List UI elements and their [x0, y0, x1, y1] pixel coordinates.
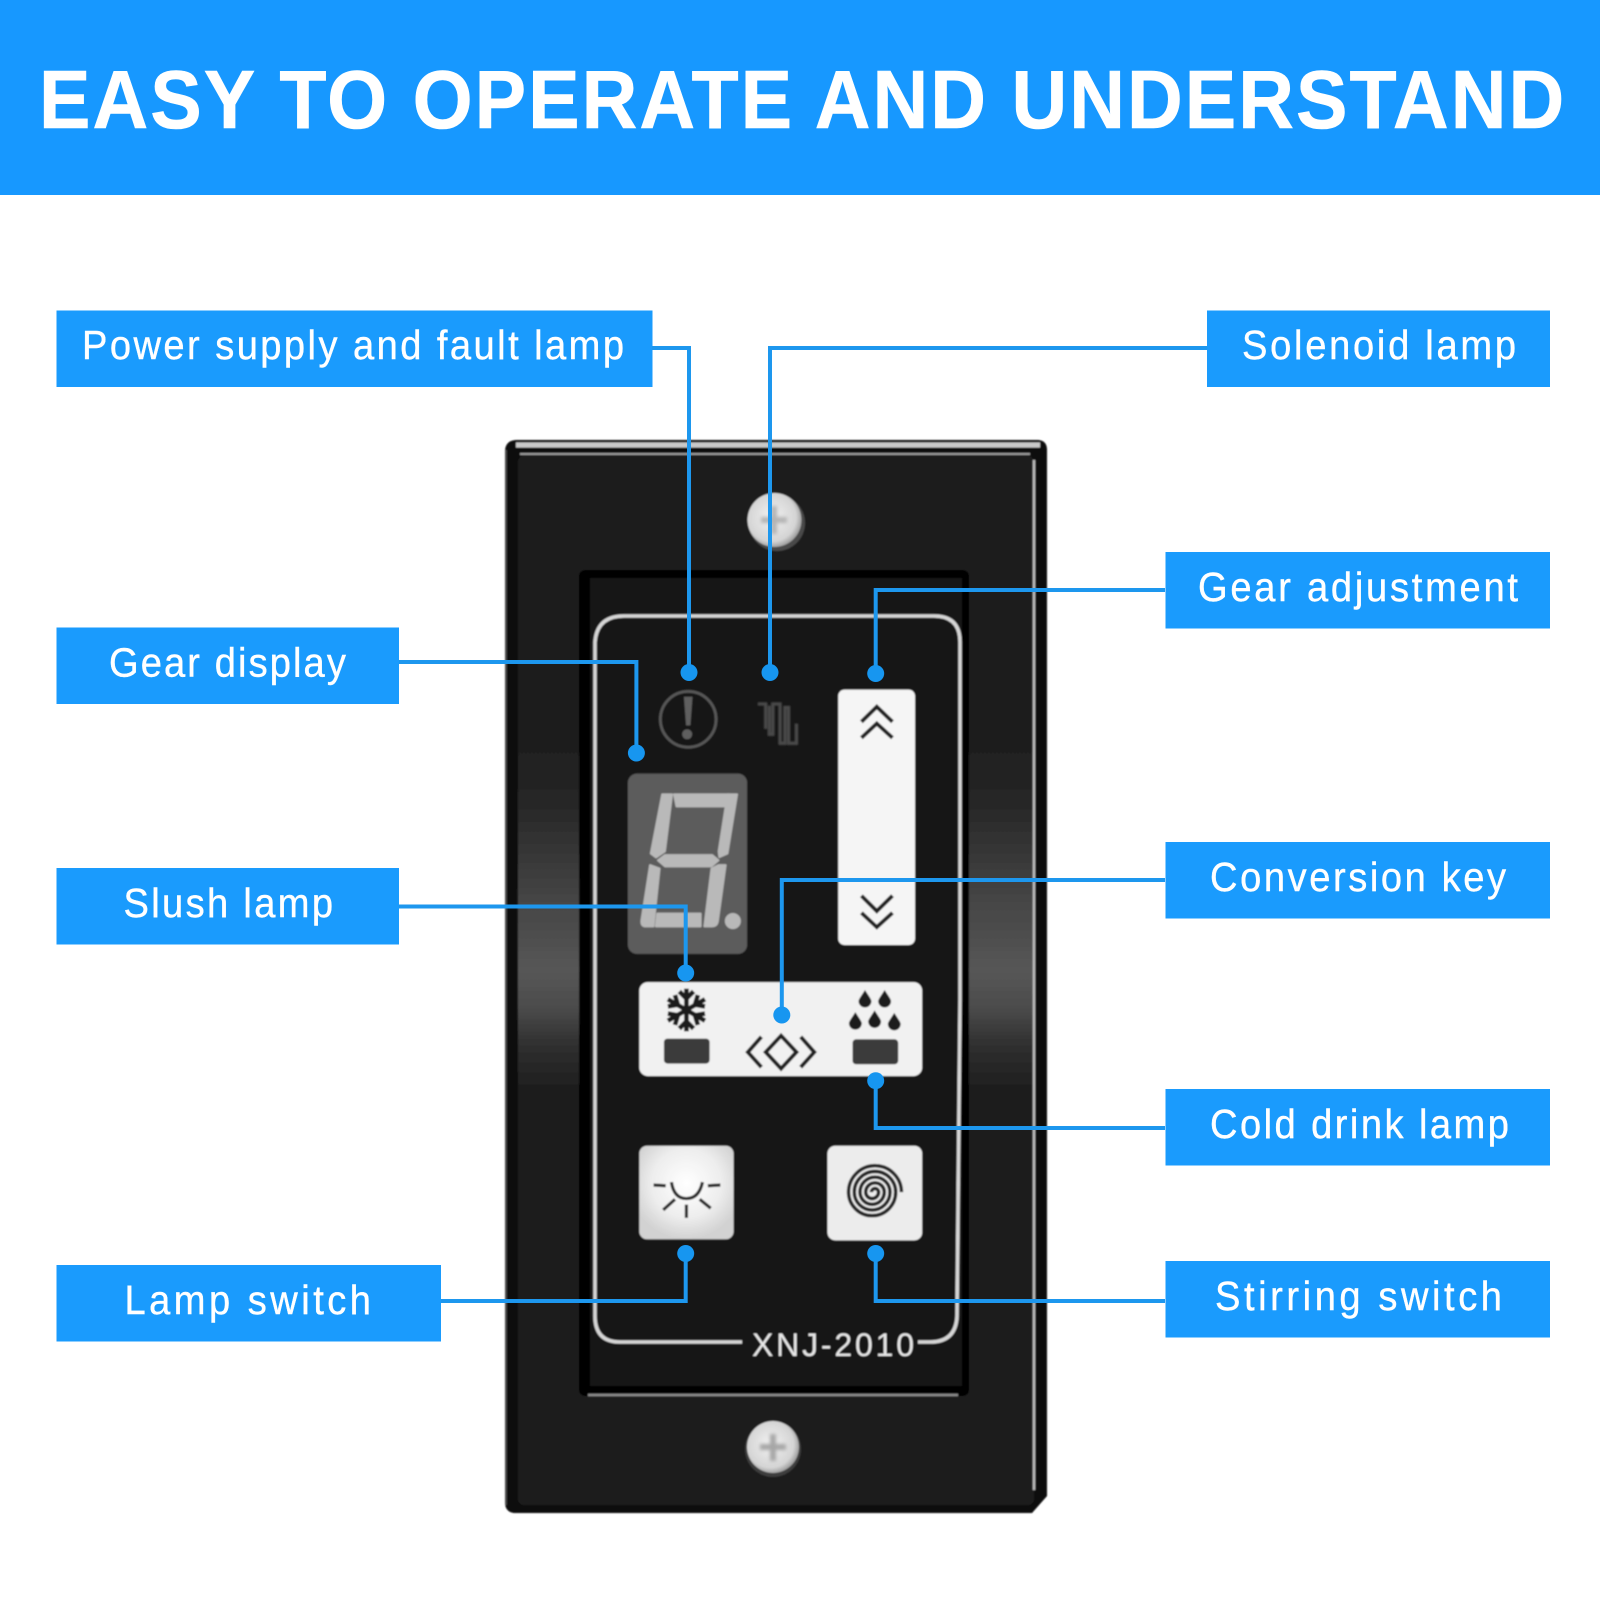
- icon: snowflake: [668, 989, 705, 1031]
- label: gear adjustment: Gear adjustment: [1198, 565, 1518, 610]
- label: stirring switch: Stirring switch: [1215, 1274, 1502, 1319]
- label: gear display: [56, 628, 399, 704]
- upper controls: [628, 690, 915, 954]
- icon: top screw: [748, 493, 805, 551]
- connector: stirring switch: [867, 1245, 1165, 1301]
- icon: spiral: [849, 1166, 901, 1216]
- label: conversion key: [1166, 842, 1550, 918]
- label: power supply and fault lamp: Power supply and fault lamp: [82, 323, 624, 368]
- control panel photo: [505, 440, 1047, 1513]
- metal faceplate: [505, 440, 1047, 1513]
- label: gear display: Gear display: [109, 640, 346, 686]
- icon: down chevrons: [861, 896, 892, 927]
- icon: up chevrons: [861, 707, 892, 738]
- connector: gear display: [399, 662, 645, 762]
- connector: slush lamp: [399, 906, 694, 982]
- label: gear adjustment: [1166, 552, 1550, 628]
- model number: XNJ-2010: [752, 1327, 914, 1363]
- stirring switch button: [827, 1146, 922, 1240]
- title: EASY TO OPERATE AND UNDERSTAND: [39, 52, 1564, 146]
- label: solenoid lamp: [1207, 310, 1550, 387]
- label: lamp switch: [56, 1265, 441, 1342]
- connector: conversion key: [773, 880, 1165, 1024]
- label: cold drink lamp: [1166, 1089, 1550, 1166]
- lower controls: [639, 982, 922, 1240]
- label: solenoid lamp: Solenoid lamp: [1242, 323, 1516, 368]
- icon: sun lamp: [654, 1182, 720, 1218]
- icon: conversion arrows: [748, 1036, 814, 1069]
- label: slush lamp: [56, 868, 399, 944]
- label: stirring switch: [1166, 1261, 1550, 1338]
- connector: power supply and fault lamp: [652, 348, 698, 681]
- white rounded outline: [595, 616, 960, 1342]
- conversion key strip: [639, 982, 922, 1076]
- label: conversion key: Conversion key: [1210, 855, 1506, 900]
- label: cold drink lamp: Cold drink lamp: [1210, 1102, 1509, 1147]
- gear adjustment key: [838, 690, 915, 945]
- connector: solenoid lamp: [762, 348, 1207, 681]
- label: lamp switch: Lamp switch: [124, 1278, 371, 1323]
- label: power supply and fault lamp: [56, 310, 652, 387]
- icon: water drops: [849, 990, 901, 1030]
- recessed control area: [579, 570, 969, 1396]
- icon: fault lamp: [660, 691, 716, 747]
- indicator cold drink: [852, 1039, 898, 1064]
- icon: solenoid lamp: [758, 704, 796, 743]
- indicator slush: [664, 1039, 710, 1064]
- icon: bottom screw: [745, 1421, 801, 1477]
- connector: lamp switch: [441, 1245, 694, 1301]
- connector: gear adjustment: [867, 590, 1165, 682]
- label: slush lamp: Slush lamp: [124, 881, 333, 926]
- lamp switch button: [639, 1146, 734, 1239]
- seven-segment gear display: [628, 774, 747, 954]
- connector: cold drink lamp: [867, 1072, 1165, 1128]
- header banner: [0, 0, 1600, 195]
